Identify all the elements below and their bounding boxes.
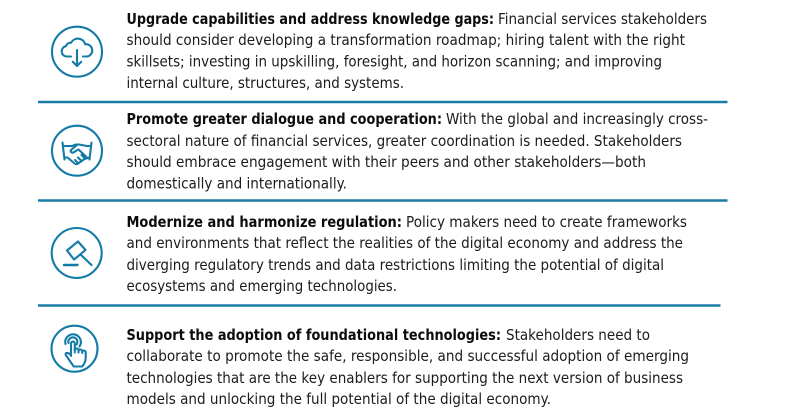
text block: foundational technologies: Stakeholders need to [506, 326, 650, 344]
text block: promote dialogue: domestically and internationally. [126, 174, 347, 192]
text block: modernize regulation: Policy makers need to create frameworks [406, 213, 687, 231]
heading: foundational technologies: Support the adoption of foundational technologies: [126, 326, 501, 344]
icon: handshake [52, 126, 102, 176]
icon: touch hand [52, 326, 98, 372]
panel: foundational technologies [52, 326, 689, 408]
text block: foundational technologies: collaborate to promote the safe, responsible, and successful adoption of emerging [126, 347, 689, 365]
panel: modernize regulation [52, 213, 687, 295]
icon: cloud download [52, 27, 102, 77]
text block: upgrade capabilities: internal culture, structures, and systems. [126, 74, 404, 92]
heading: upgrade capabilities: Upgrade capabilities and address knowledge gaps: [126, 10, 494, 28]
text block: promote dialogue: With the global and increasingly cross- [446, 110, 708, 128]
text block: upgrade capabilities: should consider developing a transformation roadmap; hiring talent with the right [126, 31, 685, 49]
text block: modernize regulation [126, 213, 687, 295]
text block: modernize regulation: and environments that reflect the realities of the digital economy and address the [126, 234, 683, 252]
text block: foundational technologies [126, 326, 689, 408]
icon: gavel [52, 228, 102, 278]
text block: modernize regulation: diverging regulatory trends and data restrictions limiting the potential of digital [126, 256, 664, 274]
panel: upgrade capabilities [52, 10, 707, 92]
panel: promote dialogue [52, 110, 708, 192]
heading: promote dialogue: Promote greater dialogue and cooperation: [126, 110, 442, 128]
text block: promote dialogue [126, 110, 708, 192]
heading: modernize regulation: Modernize and harmonize regulation: [126, 213, 402, 231]
text block: upgrade capabilities: skillsets; investing in upskilling, foresight, and horizon scanning; and improving [126, 52, 662, 70]
text block: foundational technologies: models and unlocking the full potential of the digital economy. [126, 390, 551, 408]
text block: promote dialogue: should embrace engagement with their peers and other stakeholders—both [126, 153, 646, 171]
text block: modernize regulation: ecosystems and emerging technologies. [126, 277, 397, 295]
text block: upgrade capabilities [126, 10, 707, 92]
text block: upgrade capabilities: Financial services stakeholders [498, 10, 707, 28]
text block: foundational technologies: technologies that are the key enablers for supporting the next version of business [126, 369, 683, 387]
text block: promote dialogue: sectoral nature of financial services, greater coordination is needed. Stakeholders [126, 132, 682, 150]
